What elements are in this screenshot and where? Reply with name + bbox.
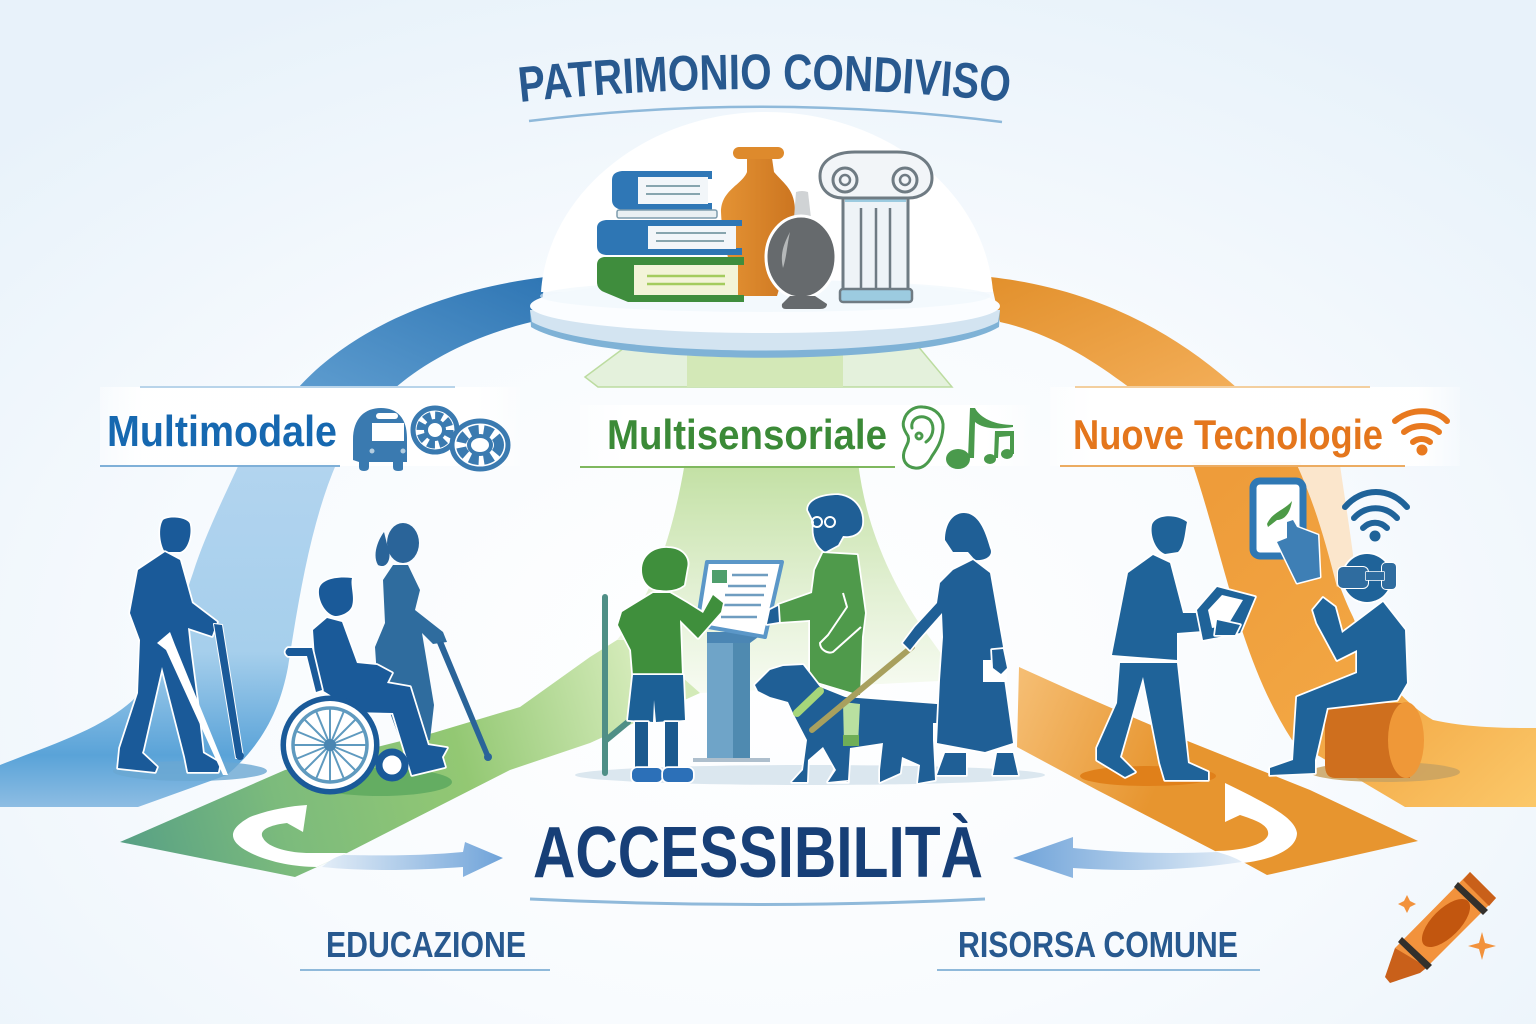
woman with cane	[375, 523, 492, 761]
ground shadow	[1080, 766, 1216, 786]
icon: ear	[903, 407, 943, 468]
panel: Nuove Tecnologie heading: Nuove Tecnologie	[1073, 411, 1383, 458]
panel: Multisensoriale heading	[580, 405, 1030, 469]
icon: bus	[353, 408, 407, 471]
grey vase	[766, 191, 836, 309]
man with canes	[118, 518, 244, 775]
dome	[541, 112, 993, 292]
title: PATRIMONIO CONDIVISO	[519, 54, 1010, 102]
harness handle	[812, 647, 912, 730]
band: blue arc from pedestal	[298, 277, 545, 388]
panel: Nuove Tecnologie heading	[1050, 387, 1460, 466]
band: pale highlight beside orange flow	[1297, 465, 1355, 587]
ground shadow seated	[1310, 762, 1460, 782]
icon: filled music note	[946, 408, 1013, 469]
kiosk	[693, 562, 782, 762]
icon: orange crayon with sparkles	[1385, 872, 1496, 983]
guide dog	[755, 665, 963, 783]
band: orange lower flow	[1192, 462, 1536, 807]
band: blue lower flow	[0, 462, 337, 807]
seated person with VR headset	[1270, 554, 1407, 775]
band: orange arrow toward centre	[1017, 667, 1418, 875]
panel: Multimodale heading: Multimodale	[107, 407, 337, 456]
pedestal with heritage objects under dome	[530, 112, 1000, 358]
orange vase	[721, 147, 795, 296]
icon: reel wheel	[452, 421, 508, 469]
woman in green with glasses	[767, 495, 865, 782]
beam centre stripe	[687, 345, 843, 387]
icon: blue wifi	[1345, 492, 1407, 542]
arrow: towards accessibility from left	[322, 842, 503, 877]
person in wheelchair	[286, 578, 447, 789]
woman in blue	[903, 513, 1018, 775]
orange stool	[1325, 702, 1424, 778]
white cane	[605, 597, 628, 773]
man with tablet	[1097, 516, 1255, 780]
beam below the pedestal	[585, 345, 952, 387]
ground shadow	[575, 765, 1045, 785]
panel: Multimodale heading	[100, 387, 520, 471]
platform	[530, 279, 1000, 358]
group: visitors using new technologies	[1080, 481, 1460, 786]
label: RISORSA COMUNE: RISORSA COMUNE	[958, 924, 1238, 965]
icon: film reel	[413, 408, 457, 452]
band: orange arc from pedestal	[990, 277, 1237, 388]
group: visitors at multisensory kiosk	[575, 495, 1045, 785]
icon: outline music notes	[984, 431, 1014, 464]
panel: Multisensoriale heading: Multisensoriale	[607, 411, 887, 458]
ground shadow	[113, 761, 267, 781]
ionic column	[820, 152, 932, 302]
band: green central beam	[617, 462, 960, 693]
group: visitors with mobility aids	[113, 518, 492, 796]
curved arrow: right	[1215, 783, 1297, 863]
band: green arrow toward centre	[120, 640, 700, 877]
icon: tablet with touching hand	[1253, 481, 1320, 583]
stack of books	[597, 171, 744, 302]
arrow: towards accessibility from right	[1013, 837, 1242, 878]
label: EDUCAZIONE: EDUCAZIONE	[326, 924, 526, 965]
ground shadow green	[308, 768, 452, 796]
child	[618, 548, 723, 782]
curved arrow: left	[233, 805, 347, 867]
icon: orange wifi	[1395, 411, 1447, 452]
heading: ACCESSIBILITÀ: ACCESSIBILITÀ	[533, 813, 983, 893]
